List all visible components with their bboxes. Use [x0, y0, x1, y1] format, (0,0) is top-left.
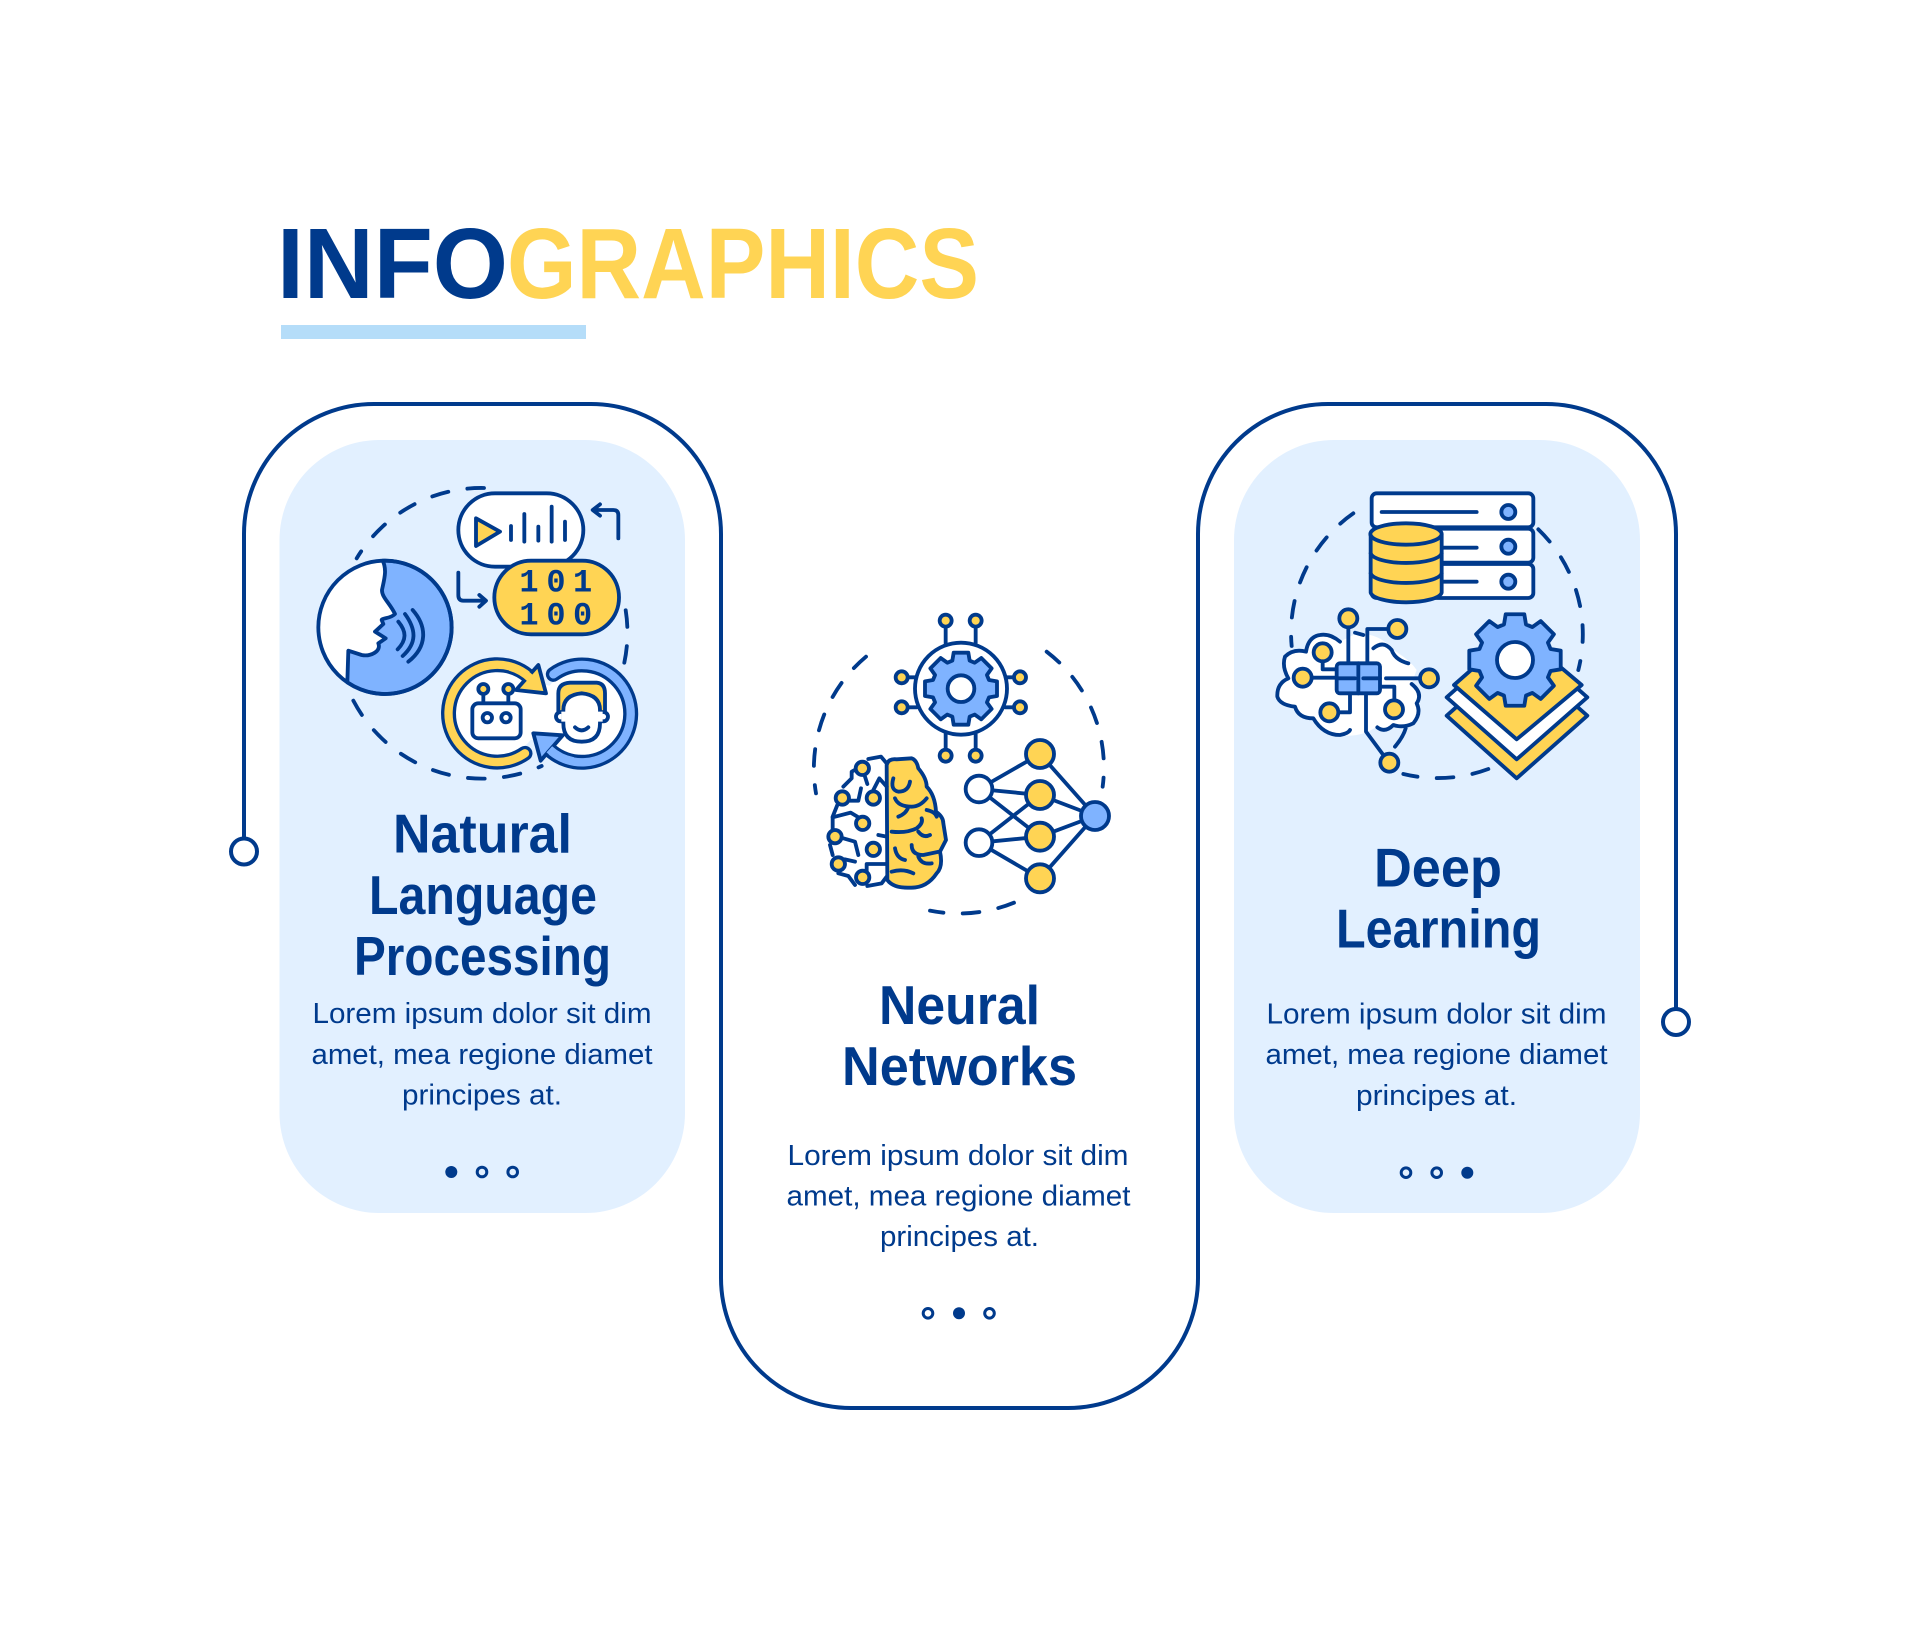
icon: robot and human exchange [449, 665, 631, 762]
text: natural language processing description: principes at. [402, 1080, 562, 1112]
icon: binary bubble: 101 [519, 565, 592, 602]
step dots: second active [923, 1307, 994, 1319]
heading: deep learning: Deep [1374, 836, 1502, 898]
heading: natural language processing: Processing [354, 925, 611, 987]
panel background: natural language processing [280, 440, 685, 1213]
text: deep learning description: amet, mea regione diamet [1266, 1039, 1608, 1071]
connecting outline [244, 404, 1676, 1408]
icon: audio bubble [458, 493, 583, 567]
panel background: deep learning [1234, 440, 1640, 1213]
outline end circle left [231, 838, 257, 864]
text: deep learning description: Lorem ipsum dolor sit dim [1266, 998, 1606, 1030]
icon: gear chip [896, 615, 1026, 762]
title [277, 208, 979, 320]
icon: conversion arrows [458, 504, 618, 607]
icon: speaking head [318, 561, 452, 694]
icon: brain [828, 757, 946, 888]
heading: neural networks: Neural [879, 974, 1040, 1036]
heading: neural networks: Networks [842, 1035, 1077, 1097]
step dots: first active [445, 1166, 518, 1178]
text: neural networks description: amet, mea regione diamet [786, 1180, 1130, 1212]
text: neural networks description [786, 1140, 1130, 1253]
heading: natural language processing: Language [369, 864, 597, 926]
icon: deep learning [1277, 493, 1587, 778]
heading: natural language processing: Natural [393, 802, 572, 864]
heading: neural networks [842, 974, 1077, 1097]
icon: layers with gear [1447, 614, 1587, 778]
icon: binary bubble: 100 [519, 597, 592, 634]
heading: natural language processing [354, 802, 611, 987]
text: natural language processing description [312, 998, 652, 1112]
text: neural networks description: Lorem ipsum dolor sit dim [788, 1140, 1128, 1172]
icon: network graph [966, 740, 1109, 892]
icon: database [1370, 523, 1442, 602]
step dots: third active [1401, 1167, 1473, 1179]
title: INFO [277, 208, 508, 320]
outline end circle right [1663, 1009, 1689, 1035]
text: deep learning description [1266, 998, 1608, 1112]
icon: server rack [1372, 493, 1533, 598]
heading: deep learning [1336, 836, 1541, 960]
title: GRAPHICS [507, 208, 979, 320]
text: neural networks description: principes at. [880, 1221, 1039, 1253]
icon: binary bubble [494, 561, 619, 634]
icon: circuit cloud brain [1277, 609, 1438, 772]
title underline [281, 325, 586, 339]
text: natural language processing description: amet, mea regione diamet [312, 1039, 652, 1071]
heading: deep learning: Learning [1336, 898, 1541, 960]
icon: neural networks [814, 615, 1109, 914]
icon: natural language processing [318, 488, 631, 779]
text: natural language processing description: Lorem ipsum dolor sit dim [312, 998, 652, 1030]
text: deep learning description: principes at. [1356, 1080, 1517, 1112]
